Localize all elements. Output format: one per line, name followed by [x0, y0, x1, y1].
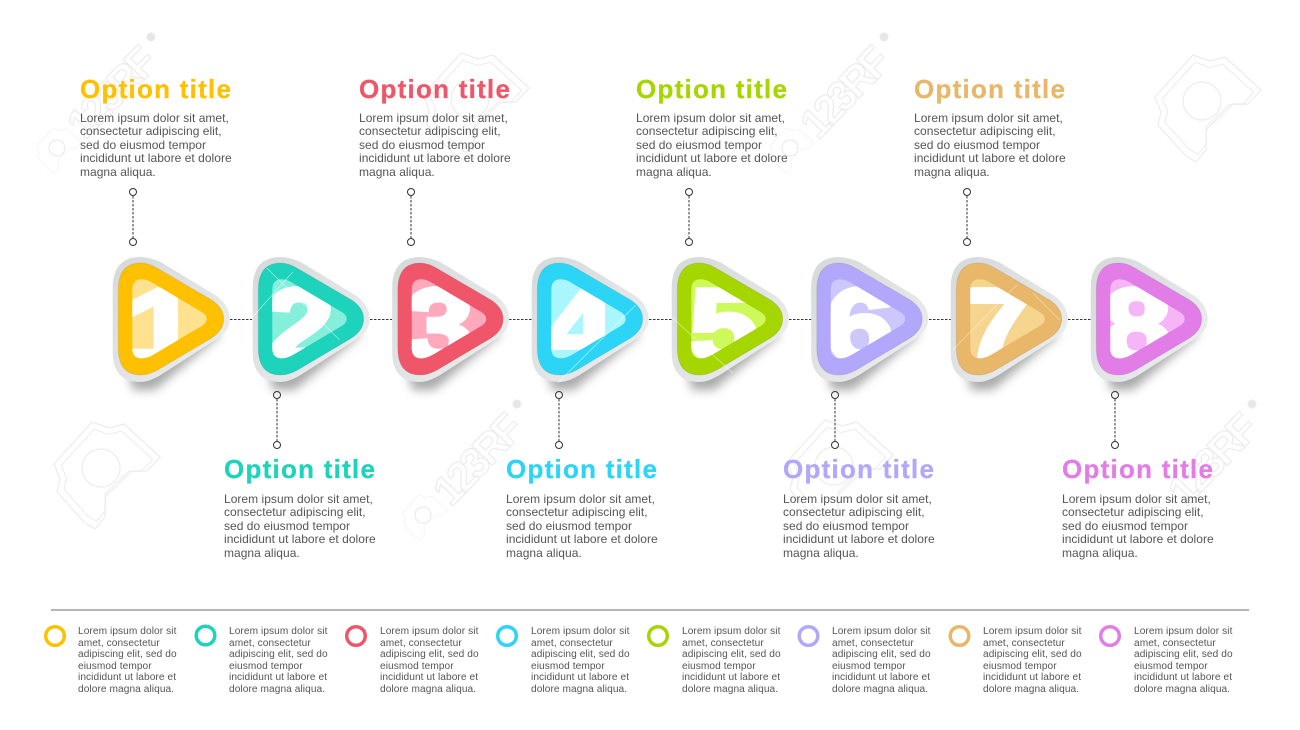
legend text 5 [682, 626, 781, 695]
callout 3: Option title [359, 74, 511, 104]
triangle 2: 2 [265, 268, 334, 385]
legend text 1 [78, 626, 177, 695]
callout 1: incididunt ut labore et dolore [80, 151, 232, 165]
legend text 3: amet, consectetur [380, 638, 462, 649]
callout 4: Option title [506, 454, 658, 484]
legend text 4: adipiscing elit, sed do [531, 649, 630, 660]
watermark layer: 123RF [58, 37, 166, 147]
callout 2: Lorem ipsum dolor sit amet, [224, 492, 373, 506]
legend text 3 [380, 626, 479, 695]
legend text 2: Lorem ipsum dolor sit [229, 626, 327, 637]
callout 1: magna aliqua. [80, 165, 156, 179]
legend text 2: incididunt ut labore et [229, 672, 327, 683]
callout 5: incididunt ut labore et dolore [636, 151, 788, 165]
legend text 6: incididunt ut labore et [832, 672, 930, 683]
callout 5 [636, 74, 788, 179]
callout 5: sed do eiusmod tempor [636, 138, 762, 152]
triangle 7 [951, 257, 1068, 390]
callout 1: sed do eiusmod tempor [80, 138, 206, 152]
legend text 3: adipiscing elit, sed do [380, 649, 479, 660]
triangle 1 [113, 257, 230, 390]
callout 4: magna aliqua. [506, 546, 582, 560]
legend text 7: incididunt ut labore et [983, 672, 1081, 683]
legend text 4 [531, 626, 630, 695]
callout 4 [506, 454, 658, 560]
legend text 3: Lorem ipsum dolor sit [380, 626, 478, 637]
callout 4: consectetur adipiscing elit, [506, 505, 648, 519]
callout 8: sed do eiusmod tempor [1062, 519, 1188, 533]
legend text 8: dolore magna aliqua. [1134, 684, 1230, 695]
callout 7: Option title [914, 74, 1066, 104]
callout 5: consectetur adipiscing elit, [636, 124, 778, 138]
triangle 2 [253, 257, 370, 390]
legend text 4: incididunt ut labore et [531, 672, 629, 683]
callout 6: Option title [783, 454, 935, 484]
legend text 5: amet, consectetur [682, 638, 764, 649]
legend text 5: dolore magna aliqua. [682, 684, 778, 695]
callout 3: sed do eiusmod tempor [359, 138, 485, 152]
leader lines with end circles [130, 188, 1118, 448]
legend text 5: eiusmod tempor [682, 661, 756, 672]
callout 1: consectetur adipiscing elit, [80, 124, 222, 138]
legend text 4: Lorem ipsum dolor sit [531, 626, 629, 637]
callout 8: consectetur adipiscing elit, [1062, 505, 1204, 519]
legend text 8: eiusmod tempor [1134, 661, 1208, 672]
watermark layer: 123RF [1159, 404, 1267, 514]
callout 7: consectetur adipiscing elit, [914, 124, 1056, 138]
triangle 6: 6 [825, 268, 894, 385]
legend text 2: amet, consectetur [229, 638, 311, 649]
triangle 8: 8 [1102, 268, 1171, 385]
callout 5: Lorem ipsum dolor sit amet, [636, 111, 785, 125]
legend text 7: adipiscing elit, sed do [983, 649, 1082, 660]
callout 8: Option title [1062, 454, 1214, 484]
triangle 7: 7 [962, 268, 1031, 385]
triangle 4 [532, 257, 649, 390]
dashed connectors between triangles [230, 318, 1091, 320]
triangle 3: 3 [405, 268, 474, 385]
callout 2 [224, 454, 376, 560]
legend text 7: eiusmod tempor [983, 661, 1057, 672]
legend text 8: Lorem ipsum dolor sit [1134, 626, 1232, 637]
watermark layer: 123RF [424, 404, 532, 514]
legend text 4: dolore magna aliqua. [531, 684, 627, 695]
callout 7: Lorem ipsum dolor sit amet, [914, 111, 1063, 125]
callout 1: Lorem ipsum dolor sit amet, [80, 111, 229, 125]
callout 5: magna aliqua. [636, 165, 712, 179]
legend text 1: eiusmod tempor [78, 661, 152, 672]
legend text 2: eiusmod tempor [229, 661, 303, 672]
callout 6: sed do eiusmod tempor [783, 519, 909, 533]
legend text 1: Lorem ipsum dolor sit [78, 626, 176, 637]
callout 4: Lorem ipsum dolor sit amet, [506, 492, 655, 506]
callout 2: incididunt ut labore et dolore [224, 532, 376, 546]
triangle 3 [392, 257, 509, 390]
callout 7: magna aliqua. [914, 165, 990, 179]
legend text 1: amet, consectetur [78, 638, 160, 649]
callout 8 [1062, 454, 1214, 560]
legend text 4: amet, consectetur [531, 638, 613, 649]
legend text 7: amet, consectetur [983, 638, 1065, 649]
callout 6 [783, 454, 935, 560]
callout 2: magna aliqua. [224, 546, 300, 560]
legend text 2: adipiscing elit, sed do [229, 649, 328, 660]
callout 6: Lorem ipsum dolor sit amet, [783, 492, 932, 506]
callout 3: magna aliqua. [359, 165, 435, 179]
legend text 6: dolore magna aliqua. [832, 684, 928, 695]
callout 7: incididunt ut labore et dolore [914, 151, 1066, 165]
legend text 6 [832, 626, 931, 695]
legend text 5: incididunt ut labore et [682, 672, 780, 683]
legend text 6: eiusmod tempor [832, 661, 906, 672]
legend text 6: adipiscing elit, sed do [832, 649, 931, 660]
legend text 5: Lorem ipsum dolor sit [682, 626, 780, 637]
callout 5: Option title [636, 74, 788, 104]
legend text 7: dolore magna aliqua. [983, 684, 1079, 695]
triangle 5: 5 [689, 268, 758, 385]
callout 8: magna aliqua. [1062, 546, 1138, 560]
callout 3 [359, 74, 511, 179]
legend text 1: adipiscing elit, sed do [78, 649, 177, 660]
legend text 3: eiusmod tempor [380, 661, 454, 672]
callout 2: consectetur adipiscing elit, [224, 505, 366, 519]
callout 3: Lorem ipsum dolor sit amet, [359, 111, 508, 125]
legend text 6: amet, consectetur [832, 638, 914, 649]
legend text 8: amet, consectetur [1134, 638, 1216, 649]
callout 4: sed do eiusmod tempor [506, 519, 632, 533]
callout 7 [914, 74, 1066, 179]
legend text 4: eiusmod tempor [531, 661, 605, 672]
callout 4: incididunt ut labore et dolore [506, 532, 658, 546]
callout 7: sed do eiusmod tempor [914, 138, 1040, 152]
legend text 8: incididunt ut labore et [1134, 672, 1232, 683]
triangle 5 [672, 257, 789, 390]
timeline of eight numbered triangles [112, 188, 1208, 449]
triangle 1: 1 [126, 267, 199, 385]
callout 2: Option title [224, 454, 376, 484]
watermark layer: 123RF [791, 37, 899, 147]
triangle 4: 4 [545, 268, 614, 385]
callout 3: incididunt ut labore et dolore [359, 151, 511, 165]
callout 8: incididunt ut labore et dolore [1062, 532, 1214, 546]
legend text 7 [983, 626, 1082, 695]
callout 8: Lorem ipsum dolor sit amet, [1062, 492, 1211, 506]
callout 1: Option title [80, 74, 232, 104]
triangle 6 [811, 257, 928, 390]
callout 6: consectetur adipiscing elit, [783, 505, 925, 519]
legend text 3: dolore magna aliqua. [380, 684, 476, 695]
callout 2: sed do eiusmod tempor [224, 519, 350, 533]
callout 1 [80, 74, 232, 179]
legend text 5: adipiscing elit, sed do [682, 649, 781, 660]
legend text 1: dolore magna aliqua. [78, 684, 174, 695]
legend text 8 [1134, 626, 1233, 695]
callout 6: incididunt ut labore et dolore [783, 532, 935, 546]
legend text 7: Lorem ipsum dolor sit [983, 626, 1081, 637]
callout 3: consectetur adipiscing elit, [359, 124, 501, 138]
legend text 6: Lorem ipsum dolor sit [832, 626, 930, 637]
callout 6: magna aliqua. [783, 546, 859, 560]
triangle 8 [1091, 257, 1208, 390]
legend text 2: dolore magna aliqua. [229, 684, 325, 695]
legend text 2 [229, 626, 328, 695]
legend text 3: incididunt ut labore et [380, 672, 478, 683]
legend text 1: incididunt ut labore et [78, 672, 176, 683]
legend text 8: adipiscing elit, sed do [1134, 649, 1233, 660]
